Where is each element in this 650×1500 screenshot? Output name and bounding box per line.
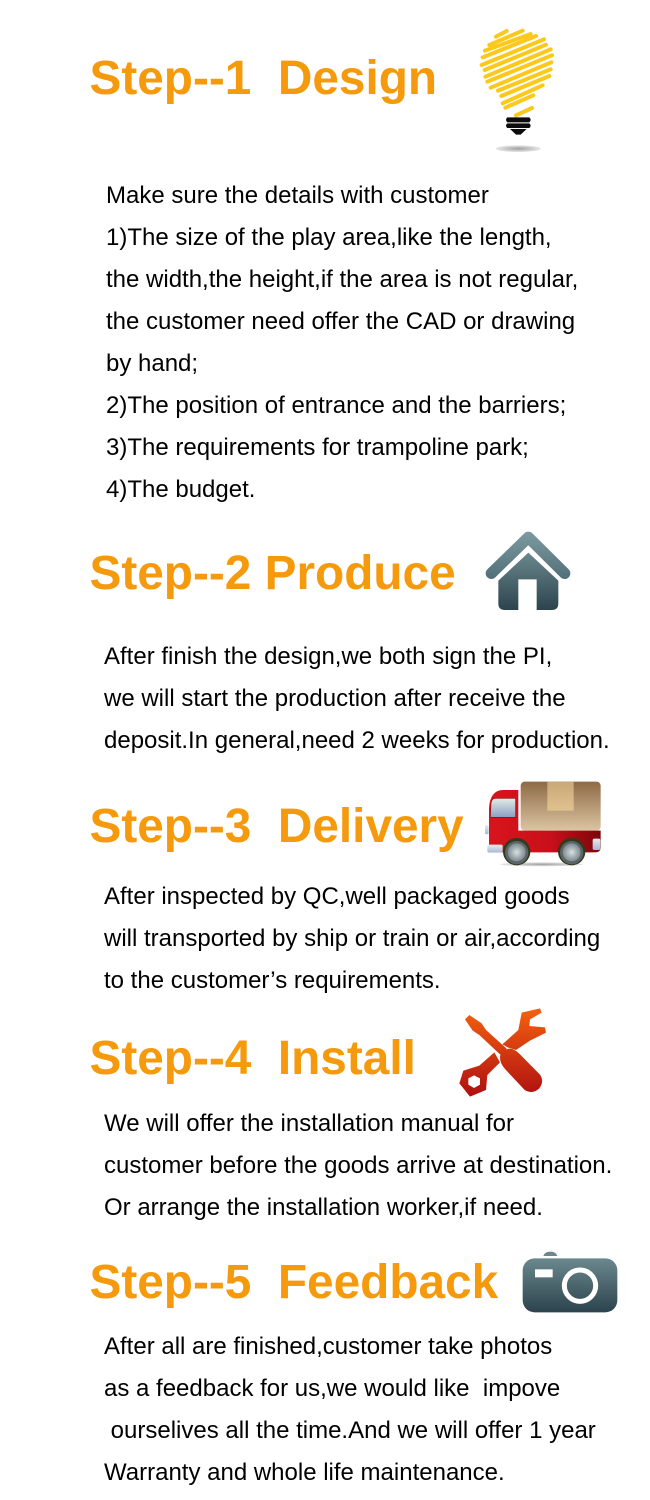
text block: step 2: After finish the design,we both sign the PI,: [104, 643, 552, 670]
text block: step 5: ourselives all the time.And we will offer 1 year: [104, 1417, 596, 1444]
text block: step 5: Warranty and whole life maintenance.: [104, 1459, 505, 1486]
icon: crossed tools: [459, 1008, 546, 1097]
icon: light bulb: [482, 31, 552, 152]
heading: step 4 install: Step--4 Install: [90, 1032, 416, 1085]
heading: step 3 delivery: Step--3 Delivery: [90, 800, 464, 853]
text block: step 2: we will start the production after receive the: [103, 685, 566, 712]
text block: step 1: the width,the height,if the area is not regular,: [106, 266, 578, 293]
text block: step 1: 2)The position of entrance and the barriers;: [106, 392, 566, 419]
text block: step 2: deposit.In general,need 2 weeks for production.: [104, 727, 610, 754]
text block: step 3: to the customer’s requirements.: [104, 967, 441, 994]
text block: step 3: will transported by ship or train or air,according: [103, 925, 600, 952]
text block: step 2: [103, 643, 610, 754]
text block: step 4: customer before the goods arrive at destination.: [104, 1152, 612, 1179]
text block: step 1: 4)The budget.: [106, 476, 255, 503]
text block: step 1: 1)The size of the play area,like the length,: [106, 224, 552, 251]
heading: step 1 design: Step--1 Design: [90, 52, 437, 105]
text block: step 1: by hand;: [106, 350, 198, 377]
heading: step 5 feedback: Step--5 Feedback: [90, 1256, 499, 1309]
text block: step 4: We will offer the installation manual for: [104, 1110, 514, 1137]
text block: step 3: After inspected by QC,well packaged goods: [104, 883, 570, 910]
text block: step 5: After all are finished,customer take photos: [104, 1333, 552, 1360]
text block: step 5: [104, 1333, 596, 1486]
text block: step 3: [103, 883, 600, 994]
icon: house: [491, 537, 565, 610]
heading: step 2 produce: Step--2 Produce: [90, 547, 456, 600]
text block: step 1: [106, 182, 578, 503]
text block: step 1: Make sure the details with customer: [106, 182, 489, 209]
icon: delivery truck: [485, 782, 601, 866]
icon: camera: [523, 1252, 617, 1312]
text block: step 1: the customer need offer the CAD or drawing: [106, 308, 575, 335]
text block: step 4: Or arrange the installation worker,if need.: [104, 1194, 543, 1221]
text block: step 1: 3)The requirements for trampoline park;: [106, 434, 529, 461]
text block: step 5: as a feedback for us,we would like impove: [104, 1375, 560, 1402]
text block: step 4: [104, 1110, 612, 1221]
